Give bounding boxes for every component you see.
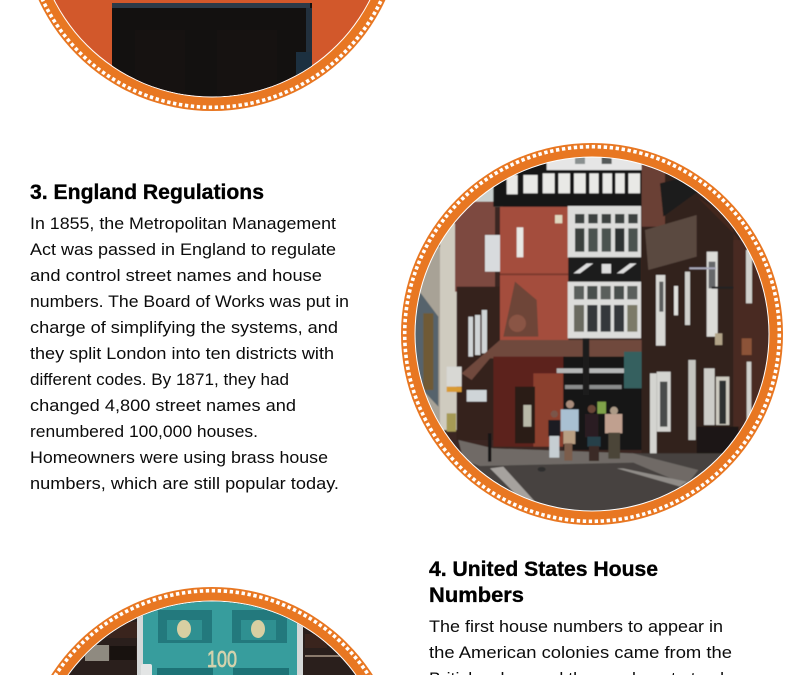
- upper timber storey: [493, 163, 642, 207]
- pedestrians: [548, 420, 560, 437]
- text block: England regulations body: and control street names and house: [30, 267, 322, 285]
- circular photo: teal door with number 100: 100: [207, 646, 237, 672]
- heading: 3. England Regulations: 3. England Regulations: [30, 180, 264, 204]
- circular photo: teal door with number 100: [51, 587, 373, 675]
- text block: United States body: the American colonies came from the: [429, 644, 732, 662]
- awning + ground floor: [462, 340, 645, 380]
- text block: United States body: The first house numbers to appear in: [429, 618, 723, 636]
- heading: 4. United States House Numbers: 4. United States House: [429, 557, 658, 581]
- text block: England regulations body: In 1855, the Metropolitan Management: [30, 215, 336, 233]
- text block: England regulations body: numbers. The Board of Works was put in: [30, 293, 349, 311]
- heading: 4. United States House Numbers: Numbers: [429, 583, 524, 607]
- text block: England regulations body: different codes. By 1871, they had: [30, 371, 289, 389]
- white bay windows: [568, 206, 641, 258]
- text block: England regulations body: renumbered 100,000 houses.: [30, 423, 258, 441]
- red tower: [500, 207, 568, 343]
- circular photo: English street scene: [400, 140, 790, 533]
- text block: England regulations body: Homeowners were using brass house: [30, 449, 328, 467]
- street: [472, 452, 722, 510]
- text block: United States body: [429, 618, 732, 675]
- sky and left buildings: [474, 187, 500, 208]
- heading: 4. United States House Numbers: [429, 557, 658, 607]
- text block: England regulations body: Act was passed in England to regulate: [30, 241, 336, 259]
- text block: England regulations body: numbers, which are still popular today.: [30, 475, 339, 493]
- text block: England regulations body: changed 4,800 street names and: [30, 397, 296, 415]
- right brick buildings: [641, 165, 740, 452]
- text block: England regulations body: they split London into ten districts with: [30, 345, 334, 363]
- circular photo: orange wall and dark door: [38, 0, 386, 111]
- text block: England regulations body: [30, 215, 349, 493]
- text block: England regulations body: charge of simplifying the systems, and: [30, 319, 338, 337]
